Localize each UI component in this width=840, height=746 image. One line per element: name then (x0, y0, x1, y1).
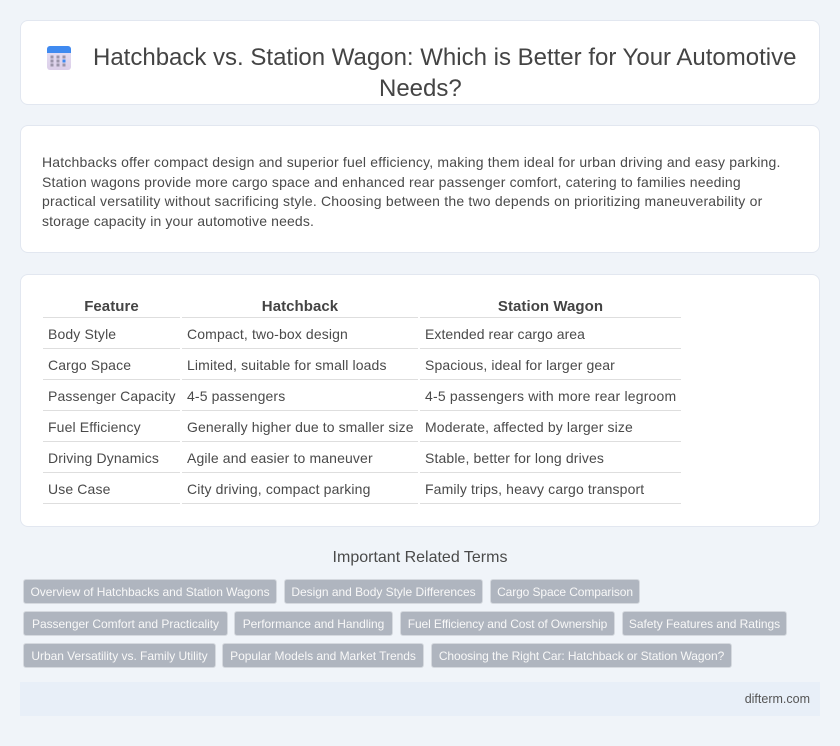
related term chips: Choosing the Right Car: Hatchback or Station Wagon? (439, 649, 724, 663)
intro card (20, 125, 820, 253)
comparison table: Fuel Efficiency (48, 419, 141, 435)
related term chips: Cargo Space Comparison (497, 585, 633, 599)
footer credit: difterm.com (745, 692, 810, 706)
comparison table: Stable, better for long drives (425, 450, 604, 466)
related term chips: Fuel Efficiency and Cost of Ownership (408, 617, 607, 631)
comparison table: Spacious, ideal for larger gear (425, 357, 615, 373)
comparison table (43, 298, 681, 504)
comparison table: Station Wagon (498, 298, 603, 315)
related term chips: Overview of Hatchbacks and Station Wagons (30, 585, 270, 599)
intro text (42, 154, 781, 229)
related term chips: Performance and Handling (243, 617, 384, 631)
comparison table: Agile and easier to maneuver (187, 450, 373, 466)
comparison table: Body Style (48, 326, 116, 342)
title: Needs? (379, 75, 462, 102)
related term chips (23, 579, 787, 668)
comparison table: Driving Dynamics (48, 450, 159, 466)
title: Hatchback vs. Station Wagon: Which is Better for Your Automotive (93, 44, 796, 71)
comparison table: Passenger Capacity (48, 388, 176, 404)
comparison table: Cargo Space (48, 357, 131, 373)
comparison table: 4-5 passengers (187, 388, 285, 404)
related term chips: Passenger Comfort and Practicality (32, 617, 219, 631)
table card (20, 274, 820, 527)
comparison table: Generally higher due to smaller size (187, 419, 414, 435)
comparison table: Moderate, affected by larger size (425, 419, 633, 435)
intro text: Station wagons provide more cargo space and enhanced rear passenger comfort, catering to families needing (42, 174, 741, 190)
related term chips: Urban Versatility vs. Family Utility (31, 649, 208, 663)
title (93, 44, 796, 102)
comparison table: City driving, compact parking (187, 481, 371, 497)
heading: related terms: Important Related Terms (333, 549, 507, 566)
comparison table: Feature (84, 298, 139, 315)
comparison table: Family trips, heavy cargo transport (425, 481, 644, 497)
header card (20, 20, 820, 105)
footer bar (20, 682, 820, 716)
comparison table: Hatchback (262, 298, 338, 315)
icon: calendar (47, 46, 71, 70)
related term chips: Popular Models and Market Trends (230, 649, 416, 663)
comparison table: Compact, two-box design (187, 326, 348, 342)
intro text: storage capacity in your automotive needs. (42, 213, 314, 229)
comparison table: 4-5 passengers with more rear legroom (425, 388, 676, 404)
comparison table: Limited, suitable for small loads (187, 357, 387, 373)
intro text: Hatchbacks offer compact design and superior fuel efficiency, making them ideal for urban driving and easy parking. (42, 154, 781, 170)
comparison table: Use Case (48, 481, 111, 497)
related term chips: Design and Body Style Differences (291, 585, 476, 599)
related term chips: Safety Features and Ratings (629, 617, 780, 631)
intro text: practical versatility without sacrificing style. Choosing between the two depends on prioritizing maneuverability or (42, 193, 762, 209)
comparison table: Extended rear cargo area (425, 326, 585, 342)
